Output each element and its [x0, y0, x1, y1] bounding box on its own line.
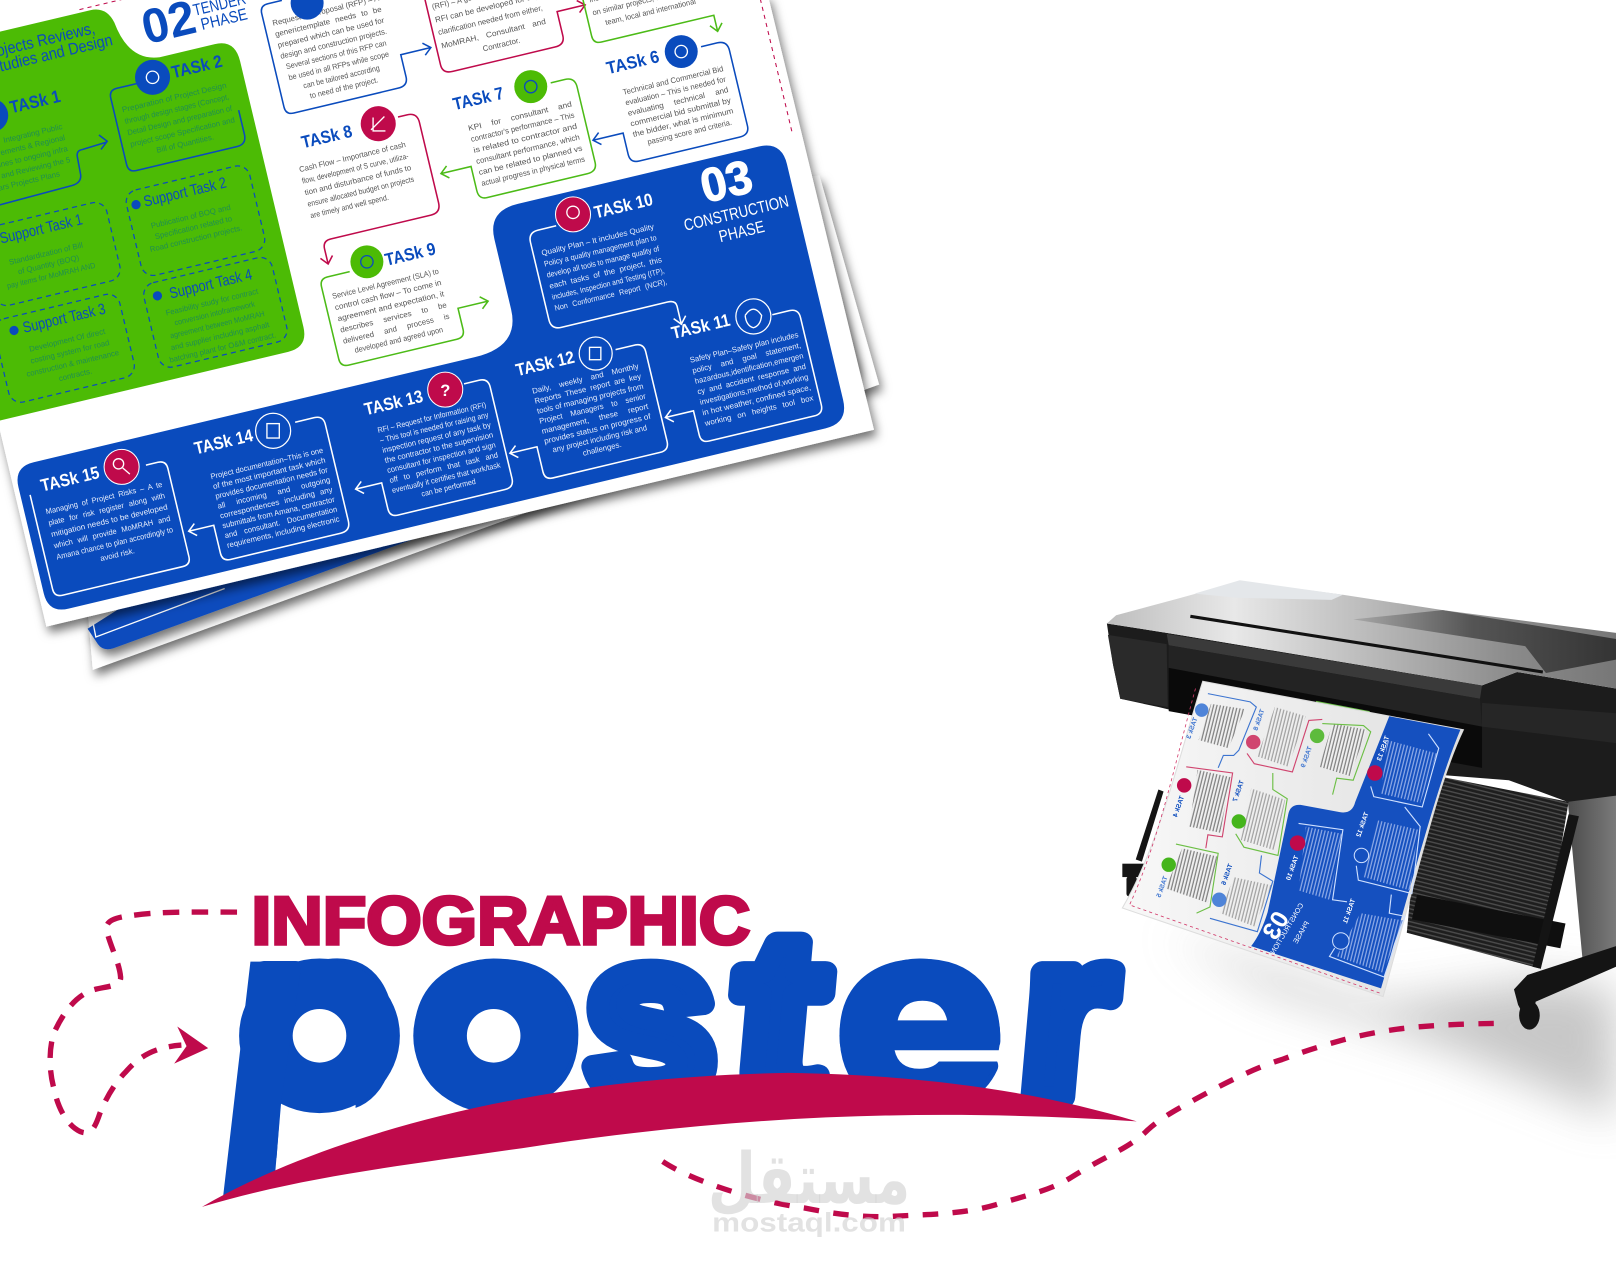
task 3: can be tailored according [302, 63, 381, 90]
task 12: any project including risk and [552, 423, 648, 454]
support task 4: Feasibility study for contract [165, 287, 260, 317]
support task 4: agreement between MoMRAH [169, 309, 266, 340]
mini mirrored headings: TASk 3 [1185, 717, 1199, 740]
task 6: TASk 6 [604, 46, 661, 78]
title: poster: p [248, 884, 393, 1149]
task 4 [416, 0, 593, 74]
task 9: TASk 9 [383, 238, 438, 270]
task 15: plate for risk register along with [47, 491, 166, 528]
task 6: passing score and criteria. [646, 118, 733, 147]
task 14: requirements, including electronic [226, 514, 340, 550]
task 3: generictemplate needs to be [274, 5, 382, 39]
mini 03 construction phase: CONSTRUCTION [1268, 901, 1305, 956]
task 15: Amana chance to plan accordingly to [56, 525, 175, 562]
task 13: can be performed [420, 477, 477, 499]
task 6: the bidder, what is minimum [632, 106, 734, 139]
task 15: which will provide MoMRAH and [52, 514, 171, 551]
printer lid slit [1190, 616, 1543, 672]
task 11: TASk 11 [669, 310, 732, 343]
mini mirrored headings: TASk 5 [1156, 875, 1170, 899]
heading: 02 tender phase [136, 0, 253, 55]
mini icons [1162, 703, 1383, 949]
printer paper basket [1407, 773, 1569, 969]
task 9: describes services to be [339, 300, 448, 335]
task 13: ? [440, 382, 450, 400]
heading: 03 construction phase: CONSTRUCTION [682, 192, 791, 235]
task 13: eventually it certifies that work/task [391, 460, 501, 495]
title: INFOGRAPHIC: INFOGRAPHIC [251, 883, 750, 959]
task 3: to need of the project. [309, 75, 379, 100]
task 13: RFI – Request for Information (RFI) [377, 400, 487, 435]
task 12: tools of managing projects from [536, 382, 644, 416]
support task 1: Standardization of Bill [8, 240, 84, 267]
support task 2: Road construction projects. [149, 223, 243, 254]
task 7: can be related to planned vs [478, 144, 583, 177]
task 2: Preparation of Project Design [121, 81, 227, 114]
task 11: in hot weather, confined space, [701, 383, 812, 417]
task 10: TASk 10 [592, 189, 655, 222]
task 11: policy and goal statement, [691, 341, 802, 375]
panel: colour blocks of the poster [0, 0, 861, 636]
support task 3: contracts. [58, 367, 93, 383]
task 6: evaluating technical and [627, 85, 729, 118]
task 2: project scope Specification and [129, 115, 236, 149]
printer front band [1167, 634, 1482, 699]
task 4: Contractor. [482, 36, 521, 53]
printer lid window [1353, 610, 1616, 673]
task 8: are timely and well spend. [309, 193, 390, 220]
watermark: mostaql.com [712, 1208, 906, 1238]
task 7: TASk 7 [451, 83, 506, 114]
heading: 03 construction phase: 03 [695, 150, 758, 214]
task 14: provides documentation needs for [214, 465, 329, 501]
task 10 [528, 189, 687, 354]
task 1: Integrating Public [2, 122, 63, 145]
heading: 02 tender phase: PHASE [199, 5, 249, 34]
task 15: TASk 15 [39, 462, 102, 496]
middle poster sheet [88, 175, 856, 649]
task 4: clarification needed from either, [437, 3, 543, 37]
printer floor shadow [1165, 933, 1616, 1118]
task 2: TASk 2 [169, 51, 224, 82]
support task 4 [141, 255, 290, 370]
printer glass [1194, 580, 1343, 600]
task 13: – This tool is needed for raising any [379, 410, 489, 445]
main poster sheet [0, 0, 874, 636]
task 13: inspection request of any task by [381, 420, 492, 455]
task 2: Bill of Quantities. [156, 132, 215, 155]
task 6 [578, 35, 750, 170]
task 14: TASk 14 [192, 425, 255, 458]
support task 3: construction & maintenance [26, 348, 120, 379]
task 12: management, these report [541, 402, 650, 436]
task 1 [0, 86, 107, 206]
task 6: Technical and Commercial Bid [622, 64, 724, 97]
task 9: Service Level Agreement (SLA) to [331, 267, 440, 301]
heading: 03 construction phase: PHASE [717, 218, 766, 246]
sheet blue block [1251, 716, 1460, 988]
task 14: Project documentation–This is one [210, 446, 324, 481]
task 10: Non Conformance Report (NCR), [554, 277, 668, 313]
printer paper slot [1169, 668, 1482, 768]
task 3: be used in all RFPs while scope [288, 50, 390, 82]
support task 4: conversion intoframework [173, 299, 256, 327]
large format printer [1107, 580, 1616, 1030]
printer front lower band [1169, 645, 1482, 727]
task 7: contractor's performance – This [470, 111, 575, 144]
task 8 [293, 106, 446, 265]
task 13: consultant for inspection and sign [386, 440, 497, 475]
task 6: commercial bid submittal by [629, 96, 732, 128]
task 12: Daily, weekly and Monthly [531, 362, 640, 396]
task 11: hazardous,identification,emergen [694, 351, 804, 386]
task 10: develop all tools to manage quality of [546, 244, 661, 280]
task 15: Managing of Project Risks – A te [45, 480, 163, 516]
task 11 [648, 299, 823, 450]
task 7 [426, 70, 597, 207]
mini mirrored headings: TASk 7 [1232, 780, 1246, 803]
mini mirrored headings: TASk 13 [1376, 735, 1391, 762]
support task 2: Specification related to [154, 214, 234, 241]
task 7: KPI for consultant and [467, 100, 573, 133]
support task 3: Support Task 3 [21, 301, 107, 337]
watermark: مستقل [708, 1137, 910, 1219]
task 13: TASk 13 [362, 386, 425, 419]
task 3 [260, 0, 438, 115]
task 10: Quality Plan – It includes Quality [540, 222, 655, 258]
title: poster: s [584, 884, 716, 1149]
green strip behind the sheet [1316, 701, 1370, 714]
task 9: developed and agreed upon [354, 325, 444, 355]
support task 4: batching plant for O&M contract. [169, 330, 277, 365]
task 13: off to perform that task and [389, 450, 499, 485]
task 13 [338, 372, 514, 523]
bottom poster sheet [62, 175, 879, 670]
mini text blocks [1166, 704, 1437, 973]
mini mirrored headings: TASk 9 [1300, 746, 1314, 769]
mini mirrored headings: TASk 12 [1355, 812, 1371, 838]
swoosh [202, 1073, 1137, 1207]
task 8: Cash Flow – Importance of cash [298, 140, 407, 174]
title: poster [223, 884, 1137, 1201]
task 10: each tasks of the project, this [548, 255, 663, 291]
task 3: design and construction projects. [279, 27, 388, 61]
task 14: submittals from Amana, contractor [221, 495, 336, 530]
task 11: investigations,method of,working [699, 372, 809, 407]
printer right module [1482, 703, 1616, 743]
task 10: Policy a quality management plan to [543, 233, 658, 269]
support task 2 [124, 163, 267, 278]
support task 1: of Quantity (BOQ) [17, 253, 80, 276]
printed poster sheet coming out of printer [1122, 681, 1463, 997]
title: poster: e [842, 884, 997, 1149]
task 9: delivered and process is [342, 312, 450, 346]
task 13: the contractor to the supervision [384, 430, 494, 465]
task 15 [30, 449, 191, 597]
task 15: avoid risk. [99, 546, 136, 563]
mini mirrored headings: TASk 4 [1172, 795, 1186, 818]
task 8: tion and disturbance of funds to [304, 163, 413, 197]
printer side column [1568, 794, 1616, 965]
printer legs and feet [1514, 814, 1616, 1030]
task 7: is related to contractor and [473, 122, 578, 155]
task 7: actual progress in physical terms [480, 155, 586, 188]
task 15: mitigation needs to be developed [50, 502, 169, 539]
sheet margin [1130, 688, 1381, 994]
task 2 [109, 51, 247, 172]
mini mirrored headings: TASk 11 [1342, 898, 1357, 925]
printer top lid [1107, 581, 1616, 688]
task 14 [170, 413, 351, 567]
dashed path left with arrow [50, 912, 237, 1133]
support task 2: Publication of BOQ and [150, 203, 232, 230]
title: poster: t [724, 884, 837, 1149]
heading: 03 construction phase [682, 150, 791, 246]
title: poster: o [416, 884, 576, 1149]
mini mirrored headings: TASk 8 [1252, 708, 1266, 732]
task 12: provides status on progress of [543, 412, 652, 446]
task 14: all incoming and outgoing [217, 475, 331, 511]
support task 3 [0, 292, 137, 405]
mini 03 construction phase: PHASE [1291, 919, 1311, 945]
support task 1 [0, 200, 123, 308]
support task 4: and supplier including asphalt [170, 320, 271, 352]
mini 03 construction phase: 03 [1258, 907, 1295, 945]
title: poster: r [1011, 884, 1126, 1149]
task 3: prepared which can be used for [277, 16, 385, 50]
left bracket and clip [1122, 789, 1164, 897]
task 9: agreement and expectation, it [337, 289, 446, 323]
printer body [1107, 624, 1616, 802]
mini mirrored headings: TASk 10 [1285, 855, 1300, 882]
support task 3: costing system for road [30, 338, 110, 366]
mini mirrored headings [1156, 708, 1391, 925]
task 3: Several sections of this RFP can [285, 38, 387, 71]
task 11: Safety Plan–Safety plan includes [689, 330, 799, 365]
task 12: challenges. [582, 440, 622, 458]
sheet paper [1122, 681, 1463, 997]
task 12 [492, 337, 669, 486]
task 7: consultant performance, which [475, 133, 581, 166]
task 12: TASk 12 [514, 347, 577, 380]
printer left cap [1108, 635, 1168, 707]
dashed path right [663, 1023, 1504, 1217]
task 10: includes, Inspection and Testing (ITP), [551, 266, 665, 302]
support task 3: Development Of direct [28, 327, 107, 354]
support task 1: pay items for MoMRAH AND [6, 261, 97, 291]
task 8: flow, development of S curve, utiliza- [301, 151, 410, 186]
arrow head [174, 1027, 208, 1064]
task 1: TASk 1 [8, 86, 63, 117]
printer basket dark band [1412, 895, 1566, 948]
task 11: cy and accident response and [696, 362, 807, 396]
task 14: correspondences including any [219, 485, 333, 521]
task 11: working on heights tool box [703, 393, 814, 428]
task 9 [320, 238, 495, 367]
task 12: Reports These report are key [534, 372, 642, 406]
task 8: TASk 8 [299, 121, 354, 152]
task 5 [579, 0, 724, 60]
support task 2: Support Task 2 [142, 175, 228, 211]
mini mirrored headings: TASk 6 [1220, 863, 1234, 886]
task 2: Detail Design and preparation of [127, 104, 234, 137]
task 14: of the most important task which [212, 456, 326, 491]
task 1: and Reviewing the 5 [0, 155, 72, 180]
support task 1: Support Task 1 [0, 211, 84, 247]
task 12: Project Managers to senior [538, 392, 647, 426]
mini card outlines [1176, 694, 1439, 977]
task 2: through design stages (Concept, [124, 92, 230, 126]
task 14: and consultant. Documentation [224, 505, 338, 540]
task 8: ensure allocated budget on projects [307, 175, 415, 209]
task 6: evaluation – This is needed for [624, 75, 727, 107]
support task 4: Support Task 4 [168, 266, 254, 302]
task 9: control cash flow – To come in [334, 278, 442, 312]
mini 03 construction phase [1258, 901, 1311, 956]
task 4: MoMRAH, Consultant and [440, 17, 547, 50]
